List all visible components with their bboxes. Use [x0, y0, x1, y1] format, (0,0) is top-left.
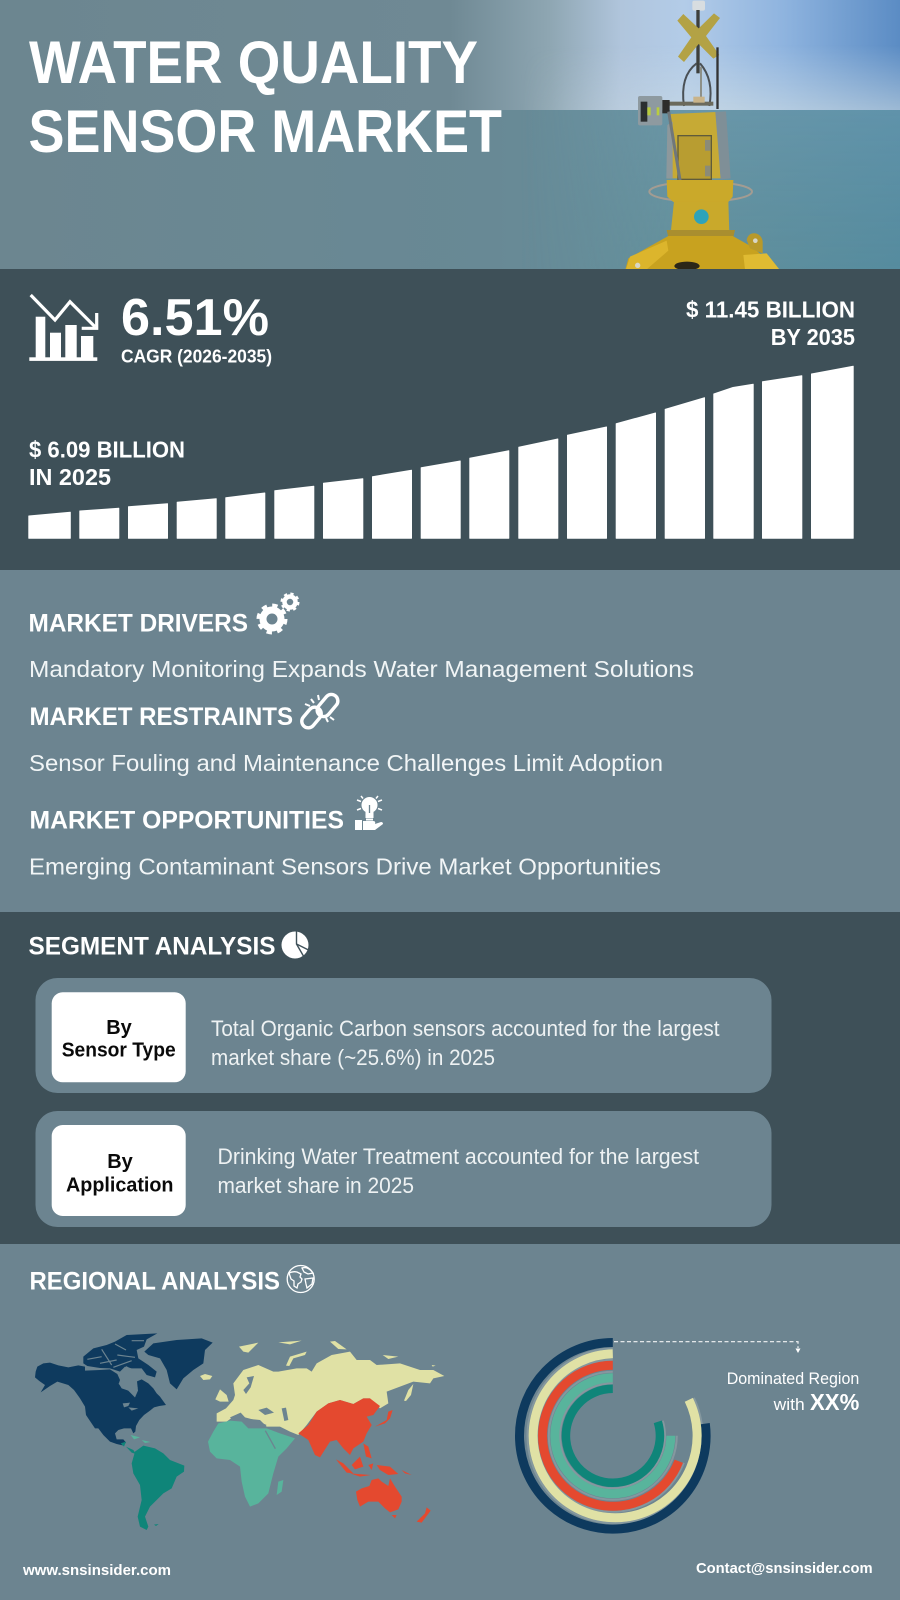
ring: navy	[520, 1342, 706, 1529]
chart: concentric regional share rings	[520, 1342, 706, 1529]
text: market restraint: Sensor Fouling and Maintenance Challenges Limit Adoption	[29, 750, 663, 776]
callout: dominated region	[727, 1369, 859, 1415]
heading: market drivers: MARKET DRIVERS	[28, 609, 248, 637]
map region: Africa	[208, 1421, 295, 1507]
icon: gears	[258, 594, 298, 632]
label box: by sensor type: Sensor Type	[62, 1040, 176, 1062]
label box: by application: Application	[66, 1175, 174, 1197]
text: application finding: Drinking Water Treatment accounted for the largest	[218, 1144, 699, 1169]
text: application finding	[218, 1144, 699, 1198]
heading: segment analysis: SEGMENT ANALYSIS	[28, 932, 276, 960]
panel: regional analysis	[0, 1244, 900, 1600]
map detail: Caribbean	[131, 1435, 151, 1443]
text: market driver: Mandatory Monitoring Expands Water Management Solutions	[29, 656, 694, 682]
CAGR value: 6.51%	[121, 289, 269, 347]
map detail: inland seas	[230, 1376, 288, 1429]
icon: bar chart with trend arrow	[29, 295, 97, 361]
ring: light teal	[555, 1378, 671, 1494]
heading: market opportunities: MARKET OPPORTUNITIES	[30, 807, 344, 835]
heading: market restraints: MARKET RESTRAINTS	[30, 703, 293, 731]
arrow: dashed callout leader	[614, 1342, 800, 1353]
ring: red	[543, 1365, 679, 1506]
2025 market value: IN 2025	[29, 464, 111, 490]
card: by sensor type	[36, 978, 772, 1093]
text: sensor type finding: Total Organic Carbon sensors accounted for the largest	[211, 1016, 720, 1041]
2035 market value: BY 2035	[771, 324, 855, 350]
icon: globe	[287, 1266, 314, 1292]
panel: market size and CAGR	[0, 269, 900, 570]
icon: yellow monitoring buoy	[625, 1, 779, 270]
title: SENSOR MARKET	[28, 98, 502, 165]
title: WATER QUALITY	[29, 29, 478, 96]
icon: lightbulb in hand	[355, 796, 383, 830]
label box: by sensor type	[52, 992, 186, 1082]
panel: drivers, restraints, opportunities	[0, 570, 900, 912]
label box: by sensor type: By	[106, 1017, 133, 1039]
2035 market value	[686, 296, 855, 350]
2035 market value: $ 11.45 BILLION	[686, 296, 855, 322]
callout: dominated region: XX%	[810, 1389, 859, 1415]
bar chart: growth 2025-2035	[29, 366, 853, 538]
map detail: bays, channels and lakes	[87, 1341, 144, 1437]
title	[28, 29, 502, 165]
map region: Asia Pacific	[298, 1398, 431, 1523]
ring: dark teal	[566, 1389, 660, 1483]
text: sensor type finding	[211, 1016, 720, 1070]
footer: website: www.snsinsider.com	[22, 1562, 171, 1579]
text: sensor type finding: market share (~25.6%) in 2025	[211, 1045, 495, 1070]
panel: segment analysis	[0, 912, 900, 1244]
heading: regional analysis: REGIONAL ANALYSIS	[30, 1267, 280, 1295]
world map by region	[35, 1333, 444, 1530]
callout: dominated region: Dominated Region	[727, 1369, 859, 1388]
footer: contact email: Contact@snsinsider.com	[696, 1560, 873, 1577]
map region: Europe and Russia	[200, 1341, 444, 1435]
text: market opportunity: Emerging Contaminant Sensors Drive Market Opportunities	[29, 854, 661, 880]
icon: pie chart	[282, 931, 308, 958]
label box: by application	[52, 1125, 186, 1216]
text: application finding: market share in 2025	[218, 1173, 414, 1198]
panel: hero header with buoy photo	[0, 0, 900, 270]
icon: broken chain	[299, 692, 341, 730]
map region: North America	[35, 1333, 213, 1445]
2025 market value: $ 6.09 BILLION	[29, 437, 185, 463]
2025 market value	[29, 437, 185, 490]
ring: cream	[533, 1354, 697, 1518]
map region: South America	[121, 1442, 184, 1530]
CAGR value: CAGR (2026-2035)	[121, 347, 272, 367]
card: by application	[36, 1111, 772, 1227]
callout: dominated region: with	[773, 1395, 805, 1414]
label box: by application: By	[107, 1151, 134, 1173]
